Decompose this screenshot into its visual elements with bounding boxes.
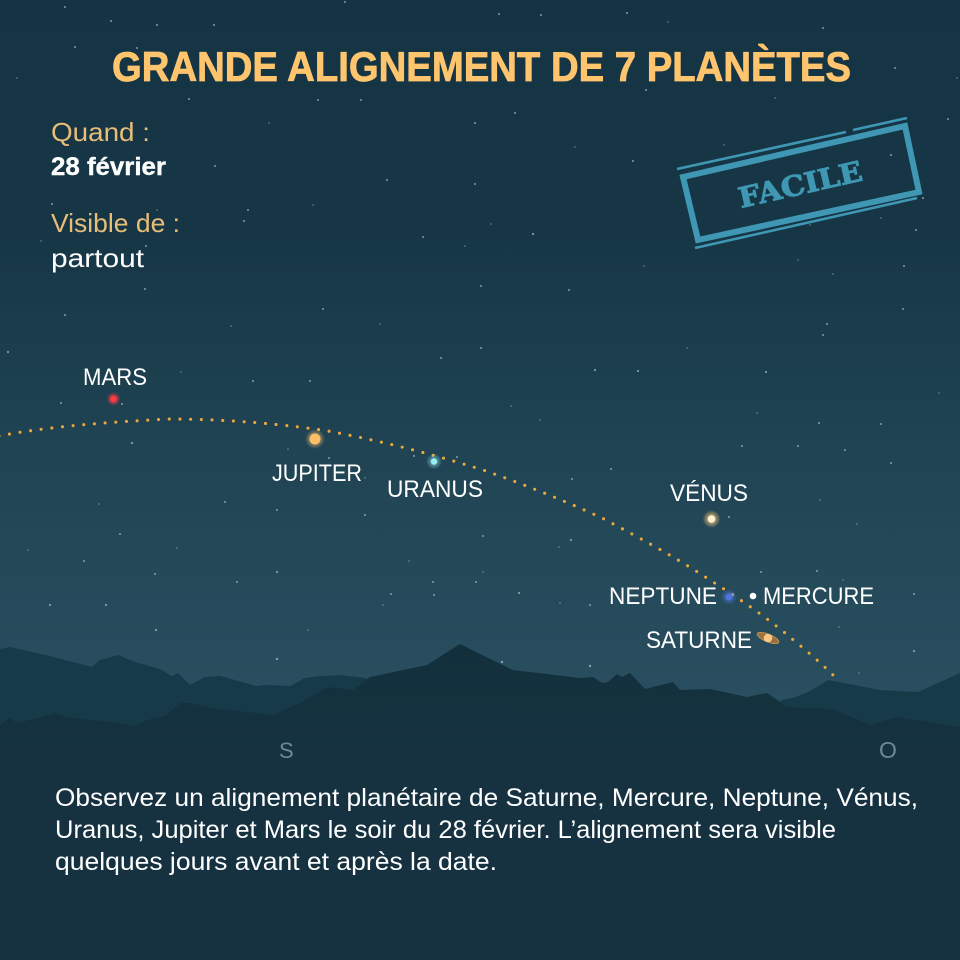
label: Mercury: MERCURE (763, 583, 874, 610)
planet: Uranus (426, 454, 442, 470)
faint stars (16, 21, 958, 674)
planet: Venus (702, 510, 720, 528)
stamp frame (683, 126, 919, 240)
planet: Saturn (756, 630, 780, 646)
title: GRANDE ALIGNEMENT DE 7 PLANÈTES (112, 43, 851, 90)
mountains: back range (0, 647, 960, 760)
label: Saturn: SATURNE (646, 627, 752, 654)
stamp outer lines (677, 118, 917, 248)
mountains: front range (0, 644, 960, 770)
value: date: 28 février (51, 153, 166, 181)
planet: Mars (106, 392, 120, 406)
planet: Jupiter (305, 429, 325, 449)
label: Quand: Quand : (51, 117, 150, 147)
label: Neptune: NEPTUNE (609, 583, 717, 610)
stamp word: FACILE (735, 155, 865, 215)
description text: Uranus, Jupiter et Mars le soir du 28 février. L’alignement sera visible (55, 816, 836, 844)
compass: south: S (279, 738, 294, 763)
description text: Observez un alignement planétaire de Saturne, Mercure, Neptune, Vénus, (55, 784, 918, 812)
value: everywhere: partout (51, 243, 145, 273)
label: Venus: VÉNUS (670, 480, 748, 507)
bottom band (0, 745, 960, 960)
ecliptic dotted path (0, 419, 834, 676)
info block: when (51, 117, 166, 181)
description text (55, 784, 918, 876)
bright stars (7, 1, 949, 667)
compass: west: O (879, 737, 897, 763)
planet: Neptune (721, 589, 737, 605)
label: Uranus: URANUS (387, 476, 483, 503)
label: Mars: MARS (83, 364, 147, 391)
label: Jupiter: JUPITER (272, 460, 362, 487)
description text: quelques jours avant et après la date. (55, 848, 497, 876)
info block: visible from (51, 208, 180, 273)
label: Visible de: Visible de : (51, 208, 180, 238)
stamp: difficulty (677, 118, 919, 248)
planet: Mercury (750, 593, 756, 599)
